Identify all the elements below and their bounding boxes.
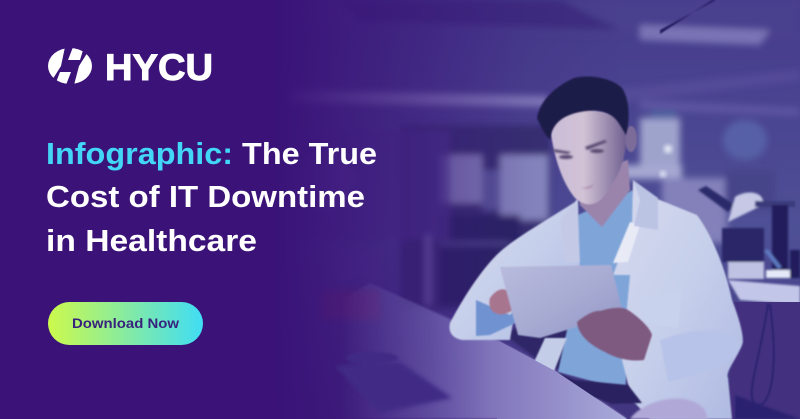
title line 3: in Healthcare <box>46 223 257 258</box>
logo wordmark: HYCU <box>105 47 213 88</box>
eyes and brows <box>553 140 607 188</box>
hand <box>577 308 652 361</box>
lab coat <box>450 180 743 419</box>
logo: HYCU <box>48 47 213 88</box>
desk with keyboard and mouse <box>335 283 627 419</box>
rolled sleeve and wrist <box>476 300 522 336</box>
face <box>549 110 626 204</box>
button label: Download Now <box>72 316 180 331</box>
dark ceiling beam <box>660 0 716 34</box>
lab bench right <box>728 280 800 305</box>
sleeve of the arm in foreground <box>630 398 708 419</box>
logo icon <box>48 47 92 85</box>
illustration: man in lab coat with tablet <box>450 76 743 419</box>
shirt <box>558 190 640 390</box>
dark area between arm and body <box>505 300 580 375</box>
hair <box>537 76 629 140</box>
button: Download Now <box>48 302 203 345</box>
title <box>46 136 377 258</box>
tablet <box>500 265 623 338</box>
title line 2: Cost of IT Downtime <box>46 179 365 214</box>
microscope <box>698 186 800 279</box>
foreground desk surface overlapping the torso <box>497 340 627 419</box>
title line 1: Infographic: The True <box>46 136 377 171</box>
neck <box>580 160 630 227</box>
belt <box>557 372 642 404</box>
